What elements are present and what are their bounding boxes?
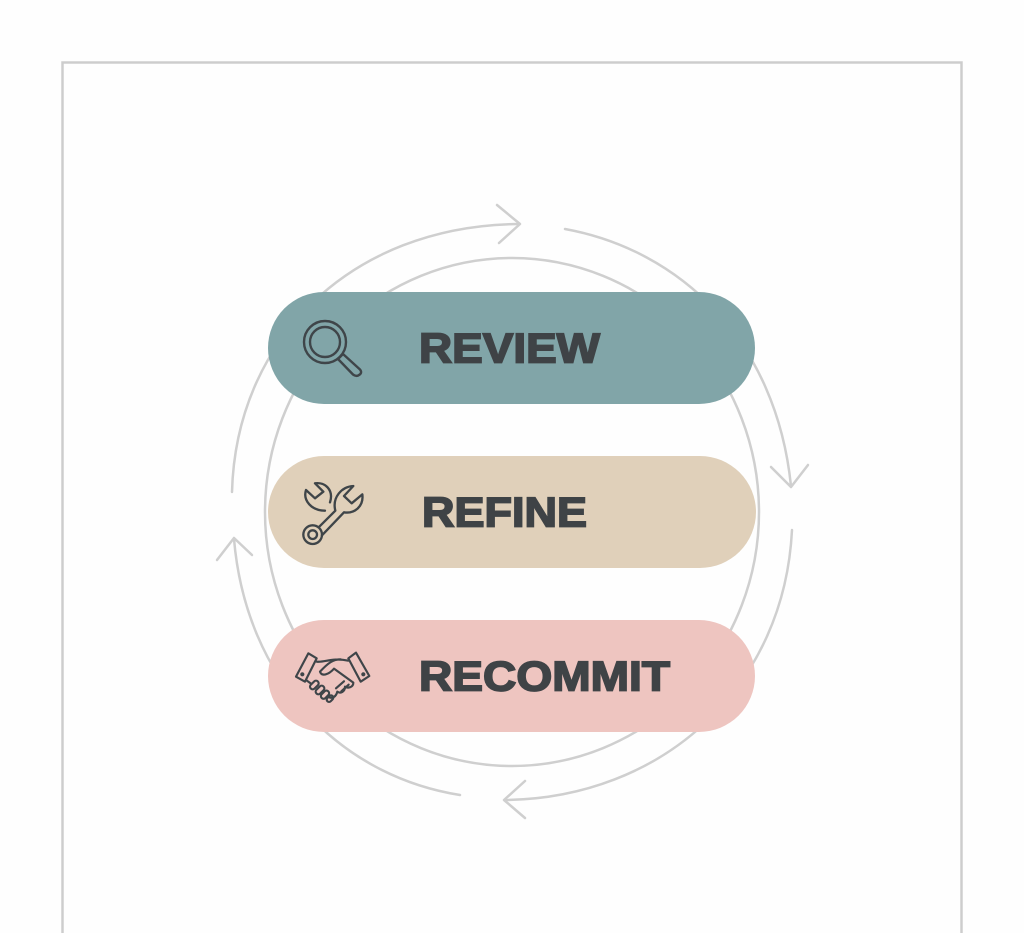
review background (268, 292, 755, 404)
inner circle (265, 258, 759, 766)
pill: review (268, 292, 755, 404)
recommit label: RECOMMIT (419, 652, 670, 700)
arrow: top right arc (565, 229, 808, 487)
review label: REVIEW (419, 324, 601, 372)
cycle diagram (217, 205, 808, 818)
arrow: bottom left arc (217, 538, 460, 795)
icon: magnifying glass (304, 321, 361, 376)
refine label: REFINE (422, 488, 587, 536)
pill: recommit (268, 620, 755, 732)
pill: refine (268, 456, 756, 568)
icon: crossed wrenches (303, 483, 363, 544)
recommit background (268, 620, 755, 732)
refine background (268, 456, 756, 568)
icon: handshake (296, 653, 369, 703)
arrow: top left arc (232, 205, 520, 492)
arrow: bottom right arc (504, 530, 792, 818)
